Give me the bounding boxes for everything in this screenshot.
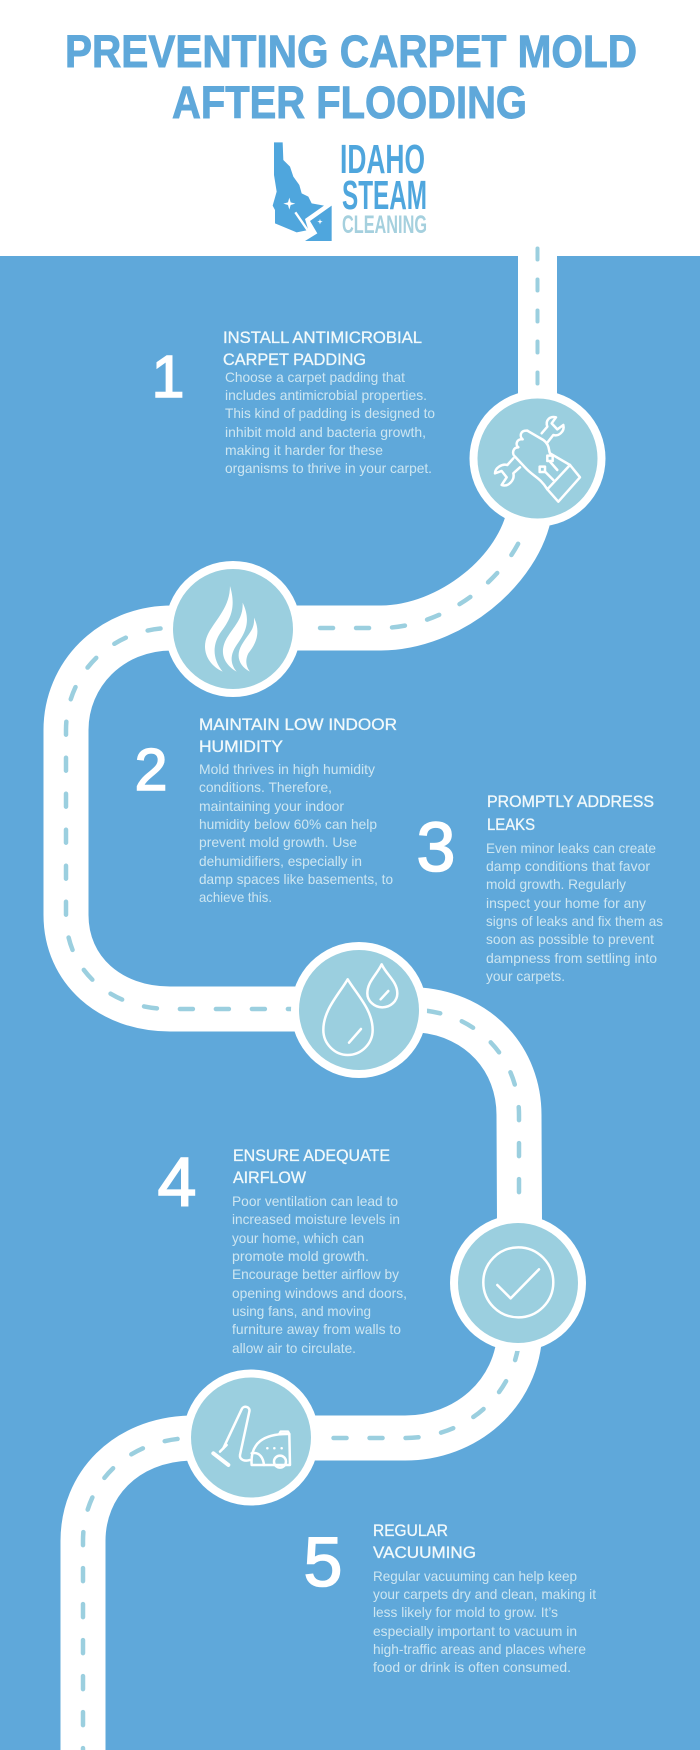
- heading 1: INSTALL ANTIMICROBIAL: [223, 329, 422, 347]
- number 2: 2: [135, 737, 167, 803]
- logo: Idaho Steam Cleaning: [273, 136, 427, 241]
- step 5: [304, 1522, 596, 1675]
- heading 2: MAINTAIN LOW INDOOR: [199, 716, 397, 734]
- text block 3: signs of leaks and fix them as: [486, 914, 663, 929]
- text block 2: maintaining your indoor: [199, 799, 344, 814]
- text block 4: allow air to circulate.: [232, 1341, 356, 1356]
- heading 4: ENSURE ADEQUATE: [233, 1147, 390, 1165]
- logo wordmark: IDAHO: [340, 136, 425, 182]
- text block 5: especially important to vacuum in: [373, 1624, 577, 1639]
- text block 1: inhibit mold and bacteria growth,: [225, 425, 426, 440]
- text block 2: prevent mold growth. Use: [199, 835, 357, 850]
- step 1: [152, 329, 435, 476]
- text block 4: Poor ventilation can lead to: [232, 1194, 398, 1209]
- text block 2: humidity below 60% can help: [199, 817, 377, 832]
- title: [65, 26, 637, 128]
- heading 3: PROMPTLY ADDRESS: [487, 793, 654, 811]
- text block 5: food or drink is often consumed.: [373, 1660, 571, 1675]
- text block 3: [486, 841, 663, 984]
- text block 5: less likely for mold to grow. It’s: [373, 1605, 558, 1620]
- heading 4: AIRFLOW: [233, 1169, 306, 1187]
- heading 3: LEAKS: [487, 816, 535, 834]
- text block 5: high-traffic areas and places where: [373, 1642, 586, 1657]
- icon: vacuum cleaner: [183, 1370, 319, 1506]
- text block 3: your carpets.: [486, 969, 565, 984]
- text block 2: achieve this.: [199, 890, 272, 905]
- heading 4: [233, 1147, 390, 1187]
- heading 2: [199, 716, 397, 756]
- step 3: [417, 793, 663, 984]
- text block 5: your carpets dry and clean, making it: [373, 1587, 596, 1602]
- step 4: [158, 1143, 407, 1356]
- text block 1: Choose a carpet padding that: [225, 370, 405, 385]
- text block 4: Encourage better airflow by: [232, 1267, 399, 1282]
- text block 3: dampness from settling into: [486, 951, 657, 966]
- text block 3: mold growth. Regularly: [486, 877, 626, 892]
- logo wordmark: CLEANING: [342, 211, 427, 239]
- heading 1: CARPET PADDING: [223, 351, 366, 369]
- heading 5: VACUUMING: [373, 1544, 476, 1562]
- heading 5: [373, 1522, 476, 1562]
- icon: check mark: [450, 1215, 586, 1351]
- text block 4: promote mold growth.: [232, 1249, 369, 1264]
- text block 2: dehumidifiers, especially in: [199, 854, 362, 869]
- text block 5: [373, 1569, 596, 1675]
- number 3: 3: [417, 808, 455, 886]
- text block 4: opening windows and doors,: [232, 1286, 407, 1301]
- title: AFTER FLOODING: [172, 77, 527, 128]
- number 1: 1: [152, 344, 184, 410]
- heading 1: [223, 329, 422, 369]
- text block 2: Mold thrives in high humidity: [199, 762, 375, 777]
- text block 4: your home, which can: [232, 1231, 364, 1246]
- text block 4: [232, 1194, 407, 1356]
- text block 4: using fans, and moving: [232, 1304, 371, 1319]
- text block 2: damp spaces like basements, to: [199, 872, 393, 887]
- heading 2: HUMIDITY: [199, 738, 283, 756]
- heading 5: REGULAR: [373, 1522, 448, 1540]
- icon: water drops: [291, 942, 427, 1078]
- number 5: 5: [304, 1523, 342, 1601]
- heading 3: [487, 793, 654, 834]
- text block 3: Even minor leaks can create: [486, 841, 656, 856]
- number 4: 4: [158, 1143, 196, 1221]
- text block 4: increased moisture levels in: [232, 1212, 400, 1227]
- text block 1: making it harder for these: [225, 443, 383, 458]
- text block 1: includes antimicrobial properties.: [225, 388, 427, 403]
- text block 2: [199, 762, 393, 905]
- title: PREVENTING CARPET MOLD: [65, 26, 637, 77]
- text block 4: furniture away from walls to: [232, 1322, 401, 1337]
- icon: hand with wrench: [470, 390, 606, 526]
- text block 3: soon as possible to prevent: [486, 932, 654, 947]
- icon: Idaho state with squeegee: [273, 142, 332, 241]
- logo wordmark: [340, 136, 427, 239]
- text block 5: Regular vacuuming can help keep: [373, 1569, 577, 1584]
- text block 1: [225, 370, 435, 476]
- text block 1: This kind of padding is designed to: [225, 406, 435, 421]
- winding road: [66, 240, 538, 1750]
- icon: steam flames: [165, 561, 301, 697]
- text block 1: organisms to thrive in your carpet.: [225, 461, 432, 476]
- logo wordmark: STEAM: [342, 172, 427, 218]
- step 2: [135, 716, 397, 905]
- text block 3: damp conditions that favor: [486, 859, 650, 874]
- text block 2: conditions. Therefore,: [199, 780, 332, 795]
- text block 3: inspect your home for any: [486, 896, 646, 911]
